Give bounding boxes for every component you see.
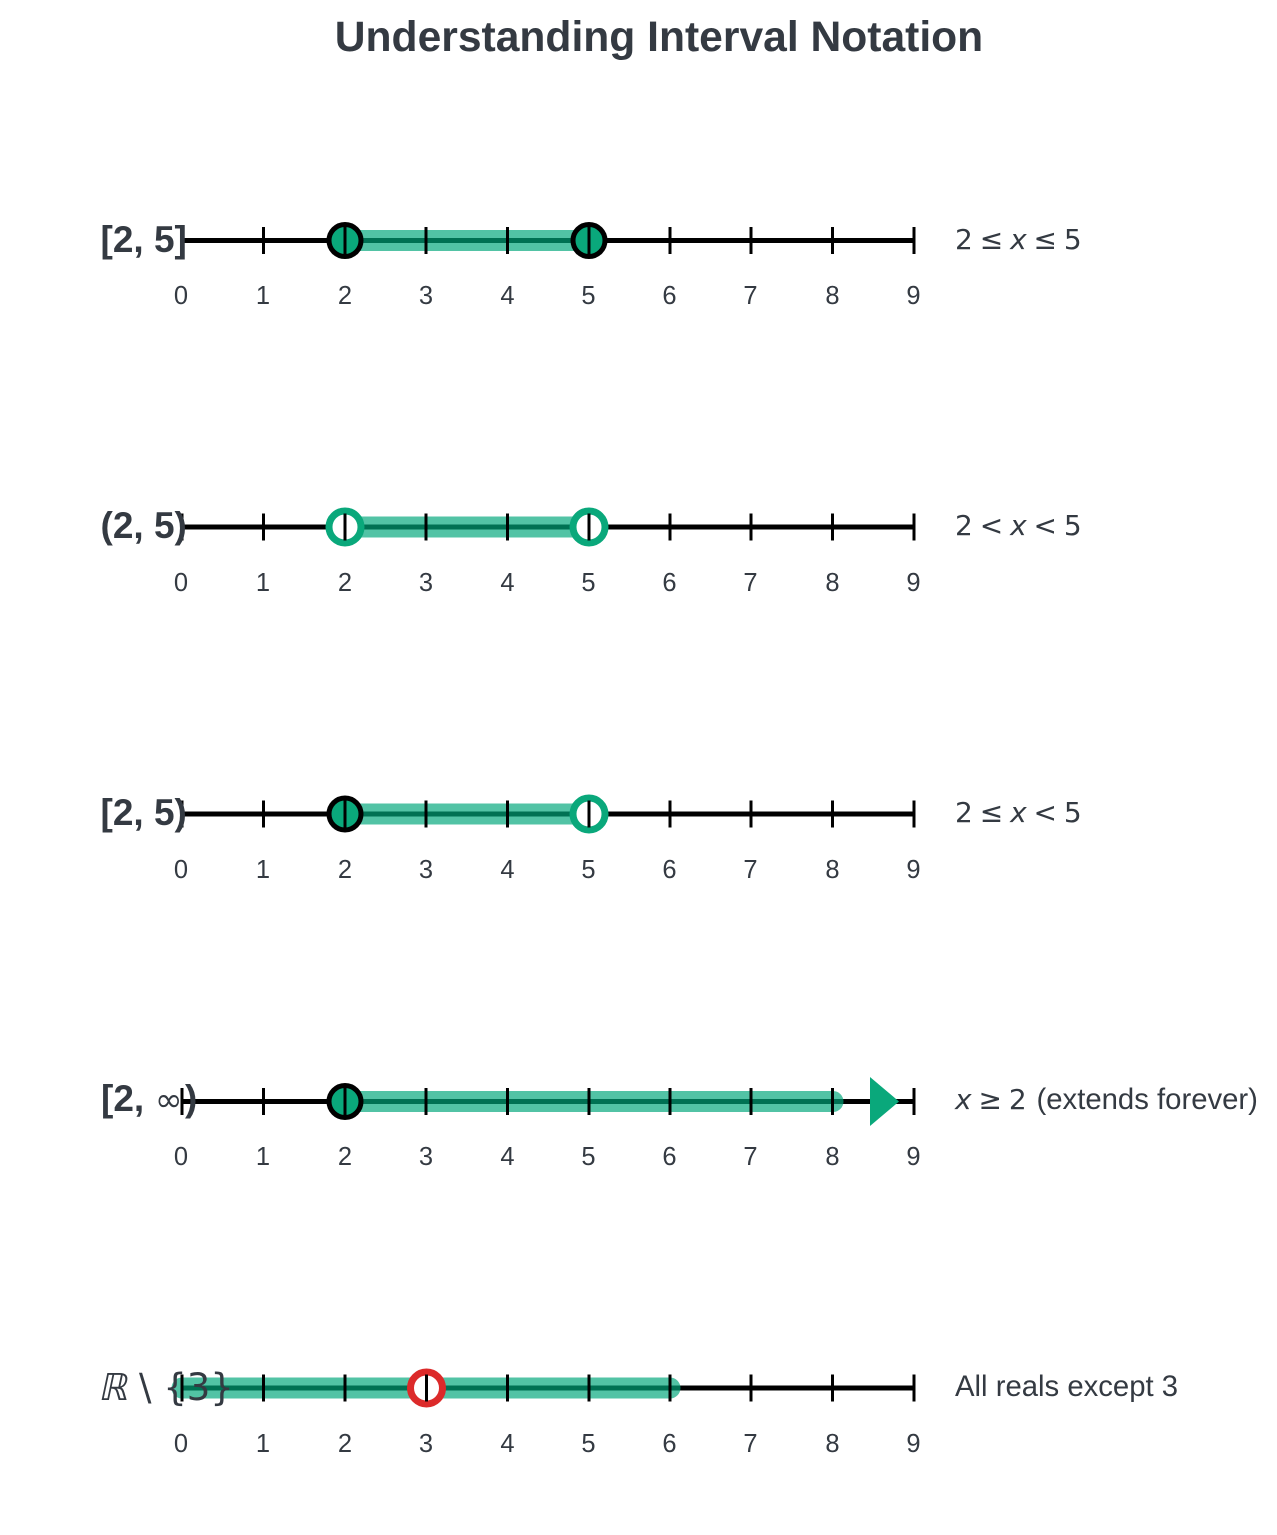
number line [182, 524, 914, 530]
axis labels: 6 [662, 282, 677, 310]
axis labels [174, 282, 921, 310]
endpoint: closed at 2 [329, 1086, 361, 1118]
axis labels [174, 856, 921, 884]
endpoint tick mark [344, 1088, 346, 1115]
axis labels: 7 [743, 569, 758, 597]
interval notation label: ℝ [96, 1365, 135, 1409]
interval notation label: [2, 5) [100, 792, 187, 833]
endpoint: open at 5 [573, 798, 605, 830]
band: half-open interval shading [345, 804, 589, 824]
panel: closed interval [100, 219, 1082, 310]
endpoint tick marks [345, 514, 589, 540]
tick marks [182, 1088, 914, 1115]
axis labels: 9 [906, 282, 921, 310]
inequality: (extends forever) [1036, 1083, 1258, 1116]
inequality: 2 ≤ x < 5 [955, 796, 1082, 829]
axis labels: 3 [419, 569, 433, 597]
axis labels: 9 [906, 1430, 921, 1458]
title: Understanding Interval Notation [335, 13, 983, 61]
axis labels: 8 [825, 1430, 840, 1458]
axis labels: 2 [338, 569, 352, 597]
inequality: x ≥ 2 [955, 1083, 1027, 1116]
axis labels: 7 [743, 282, 758, 310]
axis labels [174, 569, 921, 597]
axis labels [174, 1143, 921, 1171]
axis labels: 6 [662, 1143, 677, 1171]
axis labels: 0 [174, 569, 188, 597]
axis labels: 8 [825, 1143, 840, 1171]
axis labels: 6 [662, 1430, 677, 1458]
axis labels: 0 [174, 1143, 188, 1171]
tick marks [182, 1374, 914, 1402]
axis labels: 4 [500, 1430, 515, 1458]
panel: all reals except 3 [96, 1365, 1178, 1458]
tick marks [182, 227, 914, 254]
inequality: 2 < x < 5 [955, 509, 1082, 542]
axis labels: 4 [500, 282, 515, 310]
endpoint: open at 2 [329, 511, 361, 543]
endpoint: closed at 2 [329, 798, 361, 830]
axis labels: 5 [581, 856, 596, 884]
axis labels: 2 [338, 856, 352, 884]
endpoint: closed at 2 [329, 224, 361, 256]
axis labels: 8 [825, 569, 840, 597]
axis labels: 0 [174, 282, 188, 310]
panel: open interval [100, 505, 1082, 597]
axis labels: 7 [743, 1430, 758, 1458]
interval notation label: [2, 5] [100, 219, 187, 260]
axis labels: 7 [743, 1143, 758, 1171]
axis labels: 4 [500, 1143, 515, 1171]
axis labels: 3 [419, 282, 433, 310]
interval notation label: \ {3} [139, 1366, 234, 1409]
axis labels: 1 [256, 1430, 270, 1458]
axis labels: 6 [662, 569, 677, 597]
number line [182, 238, 914, 243]
endpoint tick marks [345, 227, 589, 254]
axis labels: 8 [825, 856, 840, 884]
number line [182, 1099, 914, 1104]
axis labels: 3 [419, 856, 433, 884]
axis labels: 3 [419, 1143, 433, 1171]
axis labels: 1 [256, 1143, 270, 1171]
axis labels: 0 [174, 856, 188, 884]
axis labels: 3 [419, 1430, 433, 1458]
endpoint: closed at 5 [573, 224, 605, 256]
axis labels: 1 [256, 569, 270, 597]
number line [182, 1386, 914, 1390]
interval notation label: (2, 5) [100, 505, 187, 546]
axis labels: 1 [256, 856, 270, 884]
interval notation label: ) [185, 1078, 197, 1119]
axis labels: 1 [256, 282, 270, 310]
axis labels: 2 [338, 1143, 352, 1171]
axis labels: 2 [338, 1430, 352, 1458]
band: open interval shading [345, 516, 589, 538]
endpoint tick marks [345, 800, 589, 828]
axis labels: 4 [500, 856, 515, 884]
axis labels: 2 [338, 282, 352, 310]
axis labels: 9 [906, 1143, 921, 1171]
panel: half-open interval [100, 792, 1082, 884]
axis labels: 8 [825, 282, 840, 310]
band: unbounded shading [345, 1091, 833, 1112]
axis labels: 4 [500, 569, 515, 597]
axis labels: 5 [581, 1143, 596, 1171]
interval notation label [96, 1365, 234, 1409]
axis labels: 9 [906, 856, 921, 884]
axis labels: 7 [743, 856, 758, 884]
endpoint: excluded 3 [410, 1372, 442, 1404]
axis labels: 5 [581, 569, 596, 597]
arrow: extends forever [870, 1077, 899, 1126]
axis labels [174, 1430, 921, 1458]
tick marks [182, 514, 914, 540]
panel: unbounded interval [101, 1077, 1258, 1171]
axis labels: 9 [906, 569, 921, 597]
endpoint: open at 5 [573, 511, 605, 543]
inequality: 2 ≤ x ≤ 5 [955, 223, 1082, 256]
number line [182, 812, 914, 816]
tick marks [182, 800, 914, 828]
band: reals shading [182, 1378, 670, 1398]
band: closed interval shading [345, 230, 589, 251]
axis labels: 0 [174, 1430, 188, 1458]
axis labels: 5 [581, 1430, 596, 1458]
interval notation label: [2, [101, 1078, 144, 1119]
axis labels: 6 [662, 856, 677, 884]
description: All reals except 3 [955, 1370, 1178, 1403]
interval notation label: ∞ [155, 1080, 182, 1119]
axis labels: 5 [581, 282, 596, 310]
endpoint tick mark [425, 1374, 428, 1402]
